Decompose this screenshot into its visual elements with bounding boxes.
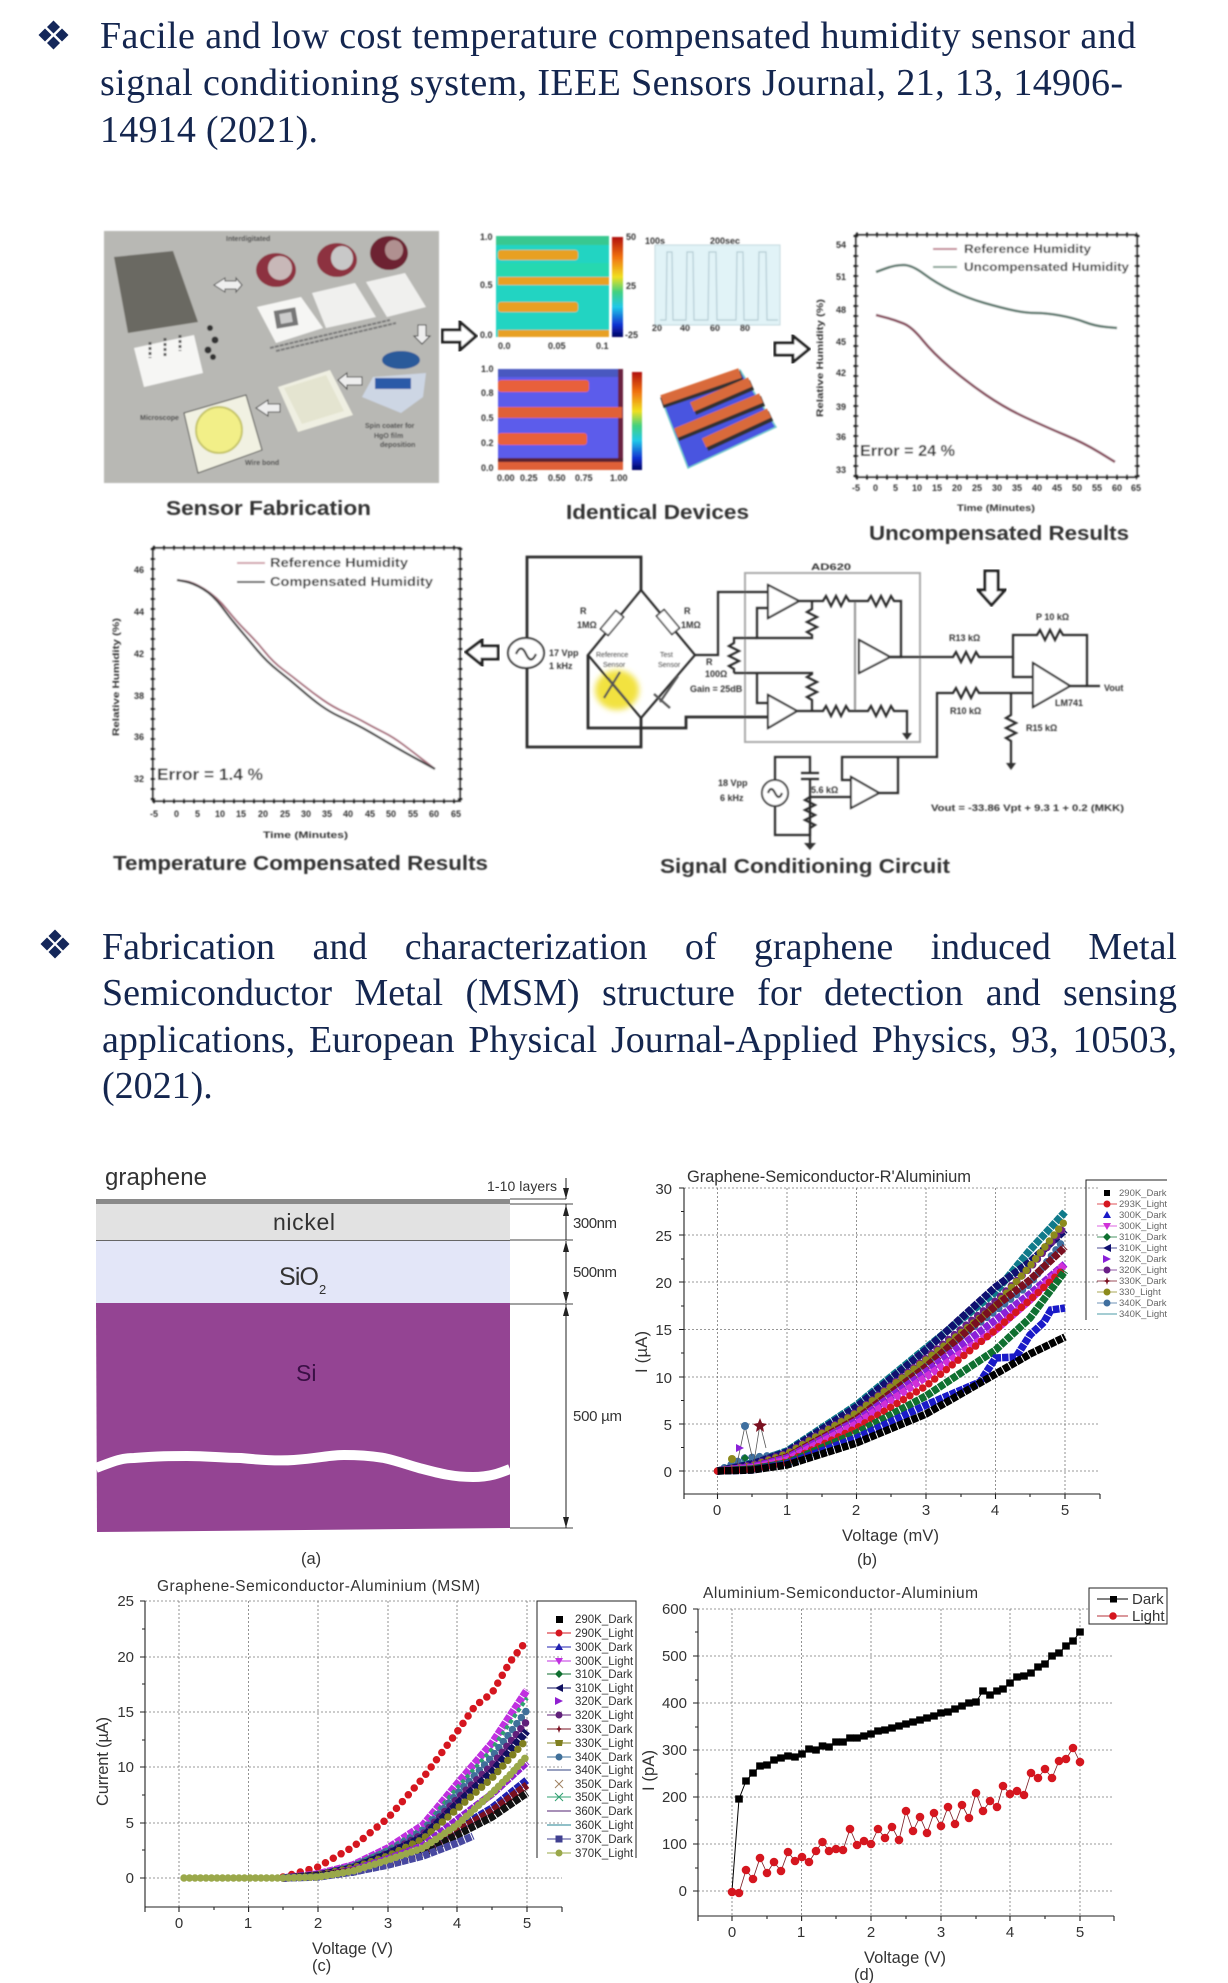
axes and grid c: 25: [117, 1593, 134, 1610]
axes and grid c: 4: [453, 1915, 461, 1932]
axes and grid d: 3: [937, 1924, 945, 1941]
heatmap: top device: 0.0: [498, 341, 511, 351]
caption: uncompensated results: Uncompensated Results: [869, 523, 1129, 545]
legend c: 370K_Light: [575, 1848, 634, 1860]
line chart: compensated humidity: 65: [451, 809, 461, 819]
schematic: bridge and amplifiers: Test: [660, 652, 673, 659]
legend c: 300K_Dark: [575, 1642, 633, 1654]
image: fabrication steps: deposition: [380, 442, 415, 449]
heatmap: top device: 25: [626, 281, 636, 291]
axes and grid d: 100: [662, 1836, 687, 1853]
chart title d: Aluminium-Semiconductor-Aluminium: [703, 1585, 978, 1602]
heading: second citation: applications, European Physical Journal-Applied Physics, 93, 10503,: [102, 1019, 1177, 1061]
line chart: uncompensated humidity: 35: [1012, 483, 1022, 493]
schematic: bridge and amplifiers: R15 kΩ: [1026, 723, 1057, 733]
line chart: uncompensated humidity: 33: [836, 465, 846, 475]
image: fabrication steps: Spin coater for: [365, 423, 415, 430]
heatmap: bottom device: 0.5: [481, 413, 494, 423]
image: fabrication steps: Interdigitated: [226, 236, 270, 243]
chart: response pulses: 40: [680, 323, 690, 333]
line chart: uncompensated humidity: 65: [1131, 483, 1141, 493]
line chart: compensated humidity: 15: [236, 809, 246, 819]
schematic: bridge and amplifiers: Vout = -33.86 Vpt + 9.3 1 + 0.2 (MKK): [931, 803, 1124, 813]
chart: response pulses: 20: [652, 323, 662, 333]
line chart: compensated humidity: 46: [134, 565, 144, 575]
panel b: graphene-semiconductor-R'aluminium chart: [633, 1168, 1167, 1569]
legend b: [1086, 1180, 1167, 1320]
schematic: bridge and amplifiers: Sensor: [603, 662, 626, 669]
heatmap: top device: [480, 232, 638, 351]
caption: temperature compensated results: Temperature Compensated Results: [113, 853, 488, 875]
figure label a: (a): [301, 1550, 321, 1568]
schematic: bridge and amplifiers: 1MΩ: [577, 620, 597, 630]
line chart: compensated humidity: 55: [408, 809, 418, 819]
line chart: uncompensated humidity: 5: [893, 483, 898, 493]
arrow: to uncompensated results: [775, 336, 809, 362]
caption: identical devices: Identical Devices: [566, 502, 749, 524]
series: light: [732, 1748, 1080, 1893]
legend b: 340K_Light: [1119, 1309, 1167, 1320]
line chart: compensated humidity: Reference Humidity: [270, 556, 408, 570]
line chart: uncompensated humidity: Time (Minutes): [957, 503, 1035, 513]
schematic: bridge and amplifiers: AD620: [811, 562, 851, 572]
image: fabrication steps: [104, 231, 439, 483]
line chart: uncompensated humidity: 48: [836, 305, 846, 315]
line chart: uncompensated humidity: 40: [1032, 483, 1042, 493]
legend c: 300K_Light: [575, 1656, 634, 1668]
axes and grid c: 20: [117, 1649, 134, 1666]
axis titles b: (b): [857, 1551, 877, 1569]
legend d: Dark: [1132, 1591, 1164, 1608]
axis titles b: Voltage (mV): [842, 1527, 939, 1545]
legend c: 330K_Light: [575, 1738, 634, 1750]
line chart: compensated humidity: 40: [343, 809, 353, 819]
axes and grid d: 400: [662, 1695, 687, 1712]
schematic: bridge and amplifiers: R13 kΩ: [949, 633, 980, 643]
schematic: bridge and amplifiers: R: [580, 606, 587, 616]
axis titles c: [94, 1717, 393, 1975]
heatmap: bottom device: 1.0: [481, 364, 494, 374]
line chart: compensated humidity: 36: [134, 732, 144, 742]
legend c: 340K_Dark: [575, 1752, 633, 1764]
line chart: uncompensated humidity: 50: [1072, 483, 1082, 493]
panel d: aluminium-semiconductor-aluminium chart: [640, 1585, 1167, 1983]
legend b: 300K_Dark: [1119, 1210, 1167, 1221]
line chart: uncompensated humidity: 55: [1092, 483, 1102, 493]
axes and grid b: 20: [655, 1275, 672, 1292]
legend b: 290K_Dark: [1119, 1188, 1167, 1199]
line chart: uncompensated humidity: 42: [836, 368, 846, 378]
line chart: compensated humidity: 50: [386, 809, 396, 819]
line chart: compensated humidity: Time (Minutes): [263, 830, 348, 840]
axes and grid d: 500: [662, 1648, 687, 1665]
text: first citation: signal conditioning system, IEEE Sensors Journal, 21, 13, 14906-: [100, 62, 1123, 104]
icon: bullet diamonds: [38, 20, 68, 50]
legend c: 310K_Dark: [575, 1669, 633, 1681]
line chart: compensated humidity: Relative Humidity (%): [111, 618, 121, 736]
line chart: compensated humidity: 35: [322, 809, 332, 819]
schematic: bridge and amplifiers: Vout: [1104, 683, 1123, 693]
axis titles d: [640, 1750, 946, 1983]
caption: signal conditioning circuit: Signal Conditioning Circuit: [660, 856, 950, 878]
heading: second citation: Fabrication and characterization of graphene induced Metal: [102, 926, 1177, 968]
heatmap: top device: 1.0: [480, 232, 493, 242]
heatmap: bottom device: [481, 364, 642, 483]
line chart: uncompensated humidity: [815, 235, 1141, 513]
schematic: bridge and amplifiers: 1 kHz: [549, 661, 573, 671]
image: fabrication steps: Wire bond: [245, 460, 279, 467]
arrow: to compensated results: [466, 640, 498, 665]
chart title c: Graphene-Semiconductor-Aluminium (MSM): [157, 1578, 480, 1595]
axes and grid c: 15: [117, 1704, 134, 1721]
heading: second citation: Semiconductor Metal (MSM) structure for detection and sensing: [102, 972, 1177, 1014]
axes and grid b: 3: [922, 1502, 930, 1519]
legend b: 330K_Dark: [1119, 1276, 1167, 1287]
panel: temperature compensated results: [111, 548, 488, 875]
line chart: compensated humidity: 32: [134, 774, 144, 784]
chart: response pulses: 200sec: [710, 236, 740, 246]
axes and grid b: 15: [655, 1322, 672, 1339]
schematic: bridge and amplifiers: P 10 kΩ: [1036, 612, 1069, 622]
line chart: compensated humidity: 45: [365, 809, 375, 819]
heatmap: bottom device: 0.50: [548, 473, 566, 483]
line chart: uncompensated humidity: 36: [836, 432, 846, 442]
heading: second citation: [102, 926, 1177, 1107]
layer labels: graphene: [105, 1164, 207, 1191]
axes and grid b: 25: [655, 1228, 672, 1245]
line chart: uncompensated humidity: 39: [836, 402, 846, 412]
line chart: compensated humidity: 0: [174, 809, 179, 819]
axis titles c: Voltage (V): [312, 1940, 393, 1958]
panel: sensor fabrication: [104, 231, 439, 520]
line chart: compensated humidity: 30: [301, 809, 311, 819]
panel: signal conditioning circuit: [508, 557, 1124, 878]
legend b: 320K_Dark: [1119, 1254, 1167, 1265]
axes and grid c: [117, 1593, 562, 1932]
heatmap: bottom device: 0.2: [481, 438, 494, 448]
arrow: to amplifier circuit: [978, 571, 1005, 605]
legend c: 340K_Light: [575, 1765, 634, 1777]
axes and grid d: 5: [1076, 1924, 1084, 1941]
line chart: uncompensated humidity: 45: [1052, 483, 1062, 493]
schematic: bridge and amplifiers: R: [684, 606, 691, 616]
line chart: compensated humidity: 44: [134, 607, 144, 617]
axis titles c: Current (µA): [94, 1717, 112, 1806]
layer labels: nickel: [273, 1209, 335, 1235]
line chart: compensated humidity: 25: [280, 809, 290, 819]
layer labels: SiO: [279, 1263, 319, 1291]
panel a: layer stack cross-section: [96, 1164, 622, 1568]
image: fabrication steps: HgO film: [374, 433, 403, 440]
dimension arrows: 300nm: [573, 1215, 617, 1232]
legend b: 300K_Light: [1119, 1221, 1167, 1232]
axis titles c: (c): [312, 1957, 331, 1975]
line chart: compensated humidity: 5: [195, 809, 200, 819]
legend c: 350K_Dark: [575, 1779, 633, 1791]
image: fabrication steps: Microscope: [140, 415, 179, 422]
layer labels: [105, 1164, 335, 1386]
line chart: uncompensated humidity: 51: [836, 272, 846, 282]
text: first citation: 14914 (2021).: [100, 109, 318, 151]
dimension arrows: 500 µm: [573, 1408, 622, 1425]
legend c: 310K_Light: [575, 1683, 634, 1695]
heatmap: bottom device: 0.25: [520, 473, 538, 483]
line chart: uncompensated humidity: 54: [836, 240, 846, 250]
axes and grid d: 0: [728, 1924, 736, 1941]
chart: response pulses: 100s: [645, 236, 665, 246]
heading: first publication: [38, 15, 1136, 151]
line chart: compensated humidity: Compensated Humidity: [270, 575, 433, 589]
line chart: uncompensated humidity: 10: [912, 483, 922, 493]
line chart: compensated humidity: Error = 1.4 %: [157, 765, 263, 784]
axes and grid b: 2: [852, 1502, 860, 1519]
legend c: 360K_Dark: [575, 1806, 633, 1818]
heatmap: bottom device: 0.0: [481, 463, 494, 473]
layer labels: 2: [319, 1282, 326, 1297]
text: first citation: [100, 15, 1136, 151]
legend d: Light: [1132, 1608, 1165, 1625]
axes and grid d: 4: [1006, 1924, 1014, 1941]
line chart: uncompensated humidity: 15: [932, 483, 942, 493]
line chart: uncompensated humidity: Uncompensated Humidity: [964, 260, 1129, 274]
line chart: compensated humidity: -5: [150, 809, 158, 819]
legend c: 370K_Dark: [575, 1834, 633, 1846]
legend c: 290K_Dark: [575, 1614, 633, 1626]
line chart: uncompensated humidity: 0: [873, 483, 878, 493]
panel c: graphene-semiconductor-aluminium MSM chart: [94, 1578, 636, 1975]
axes and grid d: 600: [662, 1601, 687, 1618]
heatmap: top device: 0.0: [480, 330, 493, 340]
layer labels: Si: [296, 1360, 316, 1386]
axes and grid b: [655, 1181, 1100, 1519]
axes and grid d: [662, 1601, 1114, 1941]
legend b: 340K_Dark: [1119, 1298, 1167, 1309]
axes and grid c: 3: [384, 1915, 392, 1932]
schematic: bridge and amplifiers: R: [706, 657, 713, 667]
heading: second citation: (2021).: [102, 1065, 213, 1107]
axes and grid b: 30: [655, 1181, 672, 1198]
axes and grid c: 0: [126, 1870, 134, 1887]
axis titles b: [633, 1331, 939, 1569]
heatmap: top device: 0.1: [596, 341, 609, 351]
heatmap: bottom device: 1.00: [610, 473, 628, 483]
chart: response pulses: 60: [710, 323, 720, 333]
axes and grid b: 5: [664, 1417, 672, 1434]
panel: identical devices: [480, 232, 780, 524]
axes and grid b: 5: [1061, 1502, 1069, 1519]
axis titles d: I (pA): [640, 1750, 658, 1791]
axes and grid c: 5: [523, 1915, 531, 1932]
schematic: bridge and amplifiers: 1MΩ: [681, 620, 701, 630]
axes and grid c: 10: [117, 1759, 134, 1776]
line chart: uncompensated humidity: 60: [1112, 483, 1122, 493]
legend c: 320K_Dark: [575, 1696, 633, 1708]
legend c: 360K_Light: [575, 1820, 634, 1832]
schematic: bridge and amplifiers: [508, 557, 1124, 850]
axes and grid c: 5: [126, 1815, 134, 1832]
axes and grid b: 10: [655, 1370, 672, 1387]
axes and grid c: 1: [244, 1915, 252, 1932]
line chart: uncompensated humidity: Error = 24 %: [860, 443, 955, 460]
legend b: 310K_Dark: [1119, 1232, 1167, 1243]
axes and grid d: 0: [679, 1883, 687, 1900]
schematic: bridge and amplifiers: Reference: [596, 652, 628, 659]
schematic: bridge and amplifiers: 5.6 kΩ: [811, 785, 838, 795]
legend c: 350K_Light: [575, 1792, 634, 1804]
line chart: compensated humidity: 42: [134, 649, 144, 659]
axes and grid b: 0: [664, 1464, 672, 1481]
schematic: bridge and amplifiers: LM741: [1055, 698, 1083, 708]
heatmap: top device: -25: [625, 330, 638, 340]
text: first citation: Facile and low cost temperature compensated humidity sensor and: [100, 15, 1136, 57]
dimension arrows: 1-10 layers: [487, 1178, 557, 1194]
legend c: [537, 1601, 636, 1860]
schematic: bridge and amplifiers: R10 kΩ: [950, 706, 981, 716]
legend c: 320K_Light: [575, 1710, 634, 1722]
dimension arrows: [487, 1178, 622, 1528]
line chart: uncompensated humidity: Relative Humidity (%): [815, 299, 825, 417]
heatmap: top device: 0.5: [480, 280, 493, 290]
caption: sensor fabrication: Sensor Fabrication: [166, 498, 371, 520]
heatmap: top device: 50: [626, 232, 636, 242]
schematic: bridge and amplifiers: 18 Vpp: [718, 778, 748, 788]
axis titles b: I (µA): [633, 1331, 651, 1373]
axes and grid d: 2: [867, 1924, 875, 1941]
line chart: uncompensated humidity: 45: [836, 337, 846, 347]
legend d: [1089, 1588, 1167, 1625]
layers: [96, 1199, 510, 1532]
line chart: uncompensated humidity: Reference Humidity: [964, 242, 1091, 256]
panel: uncompensated results: [815, 235, 1141, 545]
line chart: compensated humidity: [111, 548, 461, 840]
chart: response pulses: 80: [740, 323, 750, 333]
line chart: uncompensated humidity: 20: [952, 483, 962, 493]
heatmap: top device: 0.05: [548, 341, 566, 351]
axes and grid b: 4: [991, 1502, 999, 1519]
schematic: bridge and amplifiers: 100Ω: [705, 669, 727, 679]
line chart: compensated humidity: 10: [215, 809, 225, 819]
axes and grid d: 200: [662, 1789, 687, 1806]
line chart: compensated humidity: 20: [258, 809, 268, 819]
data series b: [718, 1212, 1065, 1471]
axes and grid d: 1: [797, 1924, 805, 1941]
schematic: bridge and amplifiers: 17 Vpp: [549, 648, 579, 658]
axes and grid c: 0: [175, 1915, 183, 1932]
schematic: bridge and amplifiers: Sensor: [658, 662, 681, 669]
line chart: uncompensated humidity: 30: [992, 483, 1002, 493]
legend b: 310K_Light: [1119, 1243, 1167, 1254]
series: dark: [732, 1632, 1080, 1891]
heatmap: bottom device: 0.75: [575, 473, 593, 483]
line chart: uncompensated humidity: -5: [852, 483, 860, 493]
arrow: to identical devices: [442, 322, 476, 350]
axes and grid d: 300: [662, 1742, 687, 1759]
line chart: compensated humidity: 38: [134, 691, 144, 701]
data series c: [184, 1640, 527, 1878]
axis titles d: Voltage (V): [864, 1949, 946, 1967]
icon: second bullet diamonds: [40, 930, 70, 958]
chart: response pulses: [645, 236, 780, 333]
schematic: bridge and amplifiers: Gain = 25dB: [690, 684, 743, 694]
legend b: 330_Light: [1119, 1287, 1161, 1298]
axes and grid b: 1: [783, 1502, 791, 1519]
heatmap: bottom device: 0.8: [481, 388, 494, 398]
axes and grid b: 0: [713, 1502, 721, 1519]
dimension arrows: 500nm: [573, 1264, 617, 1281]
legend c: 290K_Light: [575, 1628, 634, 1640]
chart title b: Graphene-Semiconductor-R'Aluminium: [687, 1168, 971, 1186]
illustration: 3D electrode device: [661, 370, 776, 468]
line chart: compensated humidity: 60: [429, 809, 439, 819]
legend c: 330K_Dark: [575, 1724, 633, 1736]
line chart: uncompensated humidity: 25: [972, 483, 982, 493]
legend b: 293K_Light: [1119, 1199, 1167, 1210]
axes and grid c: 2: [314, 1915, 322, 1932]
heatmap: bottom device: 0.00: [497, 473, 515, 483]
legend b: 320K_Light: [1119, 1265, 1167, 1276]
schematic: bridge and amplifiers: 6 kHz: [720, 793, 744, 803]
